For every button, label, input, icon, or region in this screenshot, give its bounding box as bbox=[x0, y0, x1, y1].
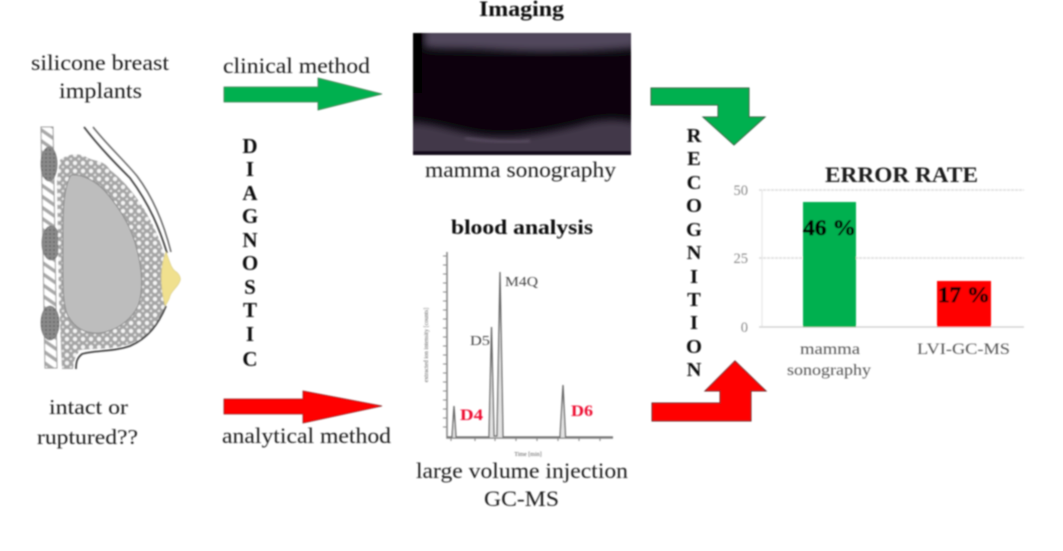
category label: LVI-GC-MS: LVI-GC-MS bbox=[917, 341, 1010, 358]
chromatogram trace bbox=[447, 272, 613, 437]
bar: mamma sonography bbox=[803, 202, 856, 327]
y axis labels: 0 bbox=[741, 320, 748, 336]
vertical heading: diagnostic: I bbox=[246, 322, 254, 346]
peak label M4Q: M4Q bbox=[505, 275, 538, 290]
vertical heading: recognition: O bbox=[686, 195, 702, 217]
label: intact or ruptured: intact or bbox=[49, 395, 128, 419]
chart: error rate bars bbox=[734, 183, 1024, 379]
label: silicone breast implants: silicone breast bbox=[31, 50, 169, 75]
vertical heading: recognition: G bbox=[686, 219, 702, 241]
category label: mamma sonography: sonography bbox=[787, 362, 871, 379]
rib muscle blocks bbox=[41, 147, 60, 340]
vertical heading: recognition: I bbox=[690, 266, 698, 288]
heading: blood analysis: blood analysis bbox=[451, 215, 593, 239]
peak label D6: D6 bbox=[571, 403, 593, 420]
label: clinical method: clinical method bbox=[223, 53, 370, 78]
vertical heading: recognition: N bbox=[687, 359, 702, 381]
x axis title: Time [min] bbox=[514, 452, 542, 458]
vertical heading: diagnostic: A bbox=[242, 181, 258, 205]
vertical heading: recognition: O bbox=[686, 336, 702, 358]
vertical heading: diagnostic: C bbox=[242, 347, 258, 371]
arrow: bent red bbox=[652, 361, 766, 421]
vertical heading: diagnostic: I bbox=[246, 157, 254, 181]
y axis labels: 50 bbox=[734, 183, 748, 199]
nipple bbox=[161, 252, 180, 306]
chromatogram axes bbox=[447, 252, 613, 438]
y axis labels bbox=[734, 183, 748, 336]
caption: large volume injection GC-MS: large volume injection bbox=[416, 458, 628, 483]
value: 17 percent: 17 % bbox=[938, 282, 990, 307]
tissue around implant bbox=[57, 154, 166, 369]
label: analytical method: analytical method bbox=[222, 423, 391, 448]
arrow: analytical method red bbox=[224, 391, 382, 423]
category label: mamma sonography: mamma bbox=[800, 341, 860, 358]
skin outline bbox=[76, 127, 167, 369]
arrow: clinical method green bbox=[224, 78, 382, 110]
vertical heading: diagnostic bbox=[242, 134, 258, 371]
image: mamma sonography scan bbox=[408, 28, 636, 160]
vertical heading: diagnostic: G bbox=[242, 204, 258, 228]
gridlines bbox=[759, 190, 1024, 258]
vertical heading: diagnostic: D bbox=[242, 134, 258, 158]
peak label D5: D5 bbox=[470, 334, 490, 349]
label: silicone breast implants: implants bbox=[59, 78, 142, 103]
illustration: breast with implant cross-section bbox=[41, 127, 180, 369]
label: silicone breast implants bbox=[31, 50, 169, 103]
heading: error rate: ERROR RATE bbox=[825, 162, 978, 187]
vertical heading: recognition: R bbox=[687, 125, 702, 147]
vertical heading: diagnostic: N bbox=[242, 228, 258, 252]
vertical heading: diagnostic: S bbox=[244, 275, 256, 299]
caption: large volume injection GC-MS: GC-MS bbox=[484, 486, 559, 511]
vertical heading: recognition bbox=[686, 125, 702, 381]
label: intact or ruptured: ruptured?? bbox=[37, 425, 138, 449]
implant bbox=[63, 175, 142, 333]
y axis labels: 25 bbox=[734, 251, 748, 267]
category label: mamma sonography bbox=[787, 341, 871, 379]
y axis title: extracted ion intensity [counts] bbox=[424, 308, 430, 382]
bar: LVI-GC-MS bbox=[937, 281, 991, 327]
vertical heading: recognition: N bbox=[687, 242, 702, 264]
vertical heading: recognition: I bbox=[690, 312, 698, 334]
value: 46 percent: 46 % bbox=[803, 215, 856, 240]
vertical heading: recognition: C bbox=[687, 172, 701, 194]
vertical heading: recognition: T bbox=[687, 289, 701, 311]
vertical heading: diagnostic: T bbox=[243, 298, 257, 322]
chart: chromatogram bbox=[424, 252, 613, 458]
caption: large volume injection GC-MS bbox=[416, 458, 628, 511]
vertical heading: diagnostic: O bbox=[242, 251, 258, 275]
arrow: bent green bbox=[651, 88, 765, 145]
caption: mamma sonography: mamma sonography bbox=[425, 157, 616, 182]
chest wall ribs bbox=[41, 127, 57, 368]
label: intact or ruptured bbox=[37, 395, 138, 449]
vertical heading: recognition: E bbox=[687, 148, 701, 170]
peak label D4: D4 bbox=[460, 407, 483, 424]
